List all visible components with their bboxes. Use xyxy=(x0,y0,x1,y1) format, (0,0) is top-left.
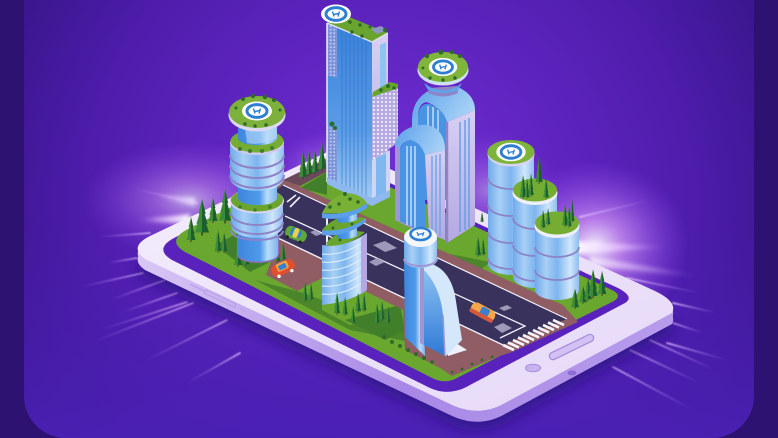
trees: left lawn xyxy=(186,190,286,267)
tower: tall glass xyxy=(321,4,398,206)
crosswalk xyxy=(503,320,564,350)
tower: mid terraced xyxy=(322,192,367,305)
trees: right patch xyxy=(571,269,606,309)
tower: twin arches, front xyxy=(395,125,445,240)
road markings xyxy=(278,185,567,345)
phone body xyxy=(138,146,673,422)
phone speaker slot xyxy=(553,338,590,356)
stacked cylinder C xyxy=(534,199,580,300)
phone screen xyxy=(163,160,629,392)
glow behind phone xyxy=(80,130,690,330)
tower: left round xyxy=(228,94,286,263)
stacked cylinder A xyxy=(488,140,534,275)
ground lawn xyxy=(176,158,618,381)
phone microphone xyxy=(568,370,576,376)
car: green xyxy=(283,224,308,245)
trees: front lawn xyxy=(334,292,390,324)
light rays: streaks xyxy=(80,188,727,410)
trees: centre lawn xyxy=(302,212,486,302)
lawn shadows xyxy=(215,172,490,345)
sidewalks xyxy=(236,160,578,376)
phone home button xyxy=(526,364,540,372)
hedge along the front edge xyxy=(382,335,493,373)
stacked cylinder B xyxy=(512,157,558,288)
road xyxy=(238,185,567,345)
phone: shadow xyxy=(138,166,673,431)
light rays: soft core xyxy=(135,194,705,277)
tower: twin arches, back xyxy=(412,50,475,243)
trees: back lawn xyxy=(299,142,326,179)
car: orange left xyxy=(270,258,297,280)
car: orange front xyxy=(469,301,497,323)
tower: front arch with helipad xyxy=(404,227,467,356)
parking patches xyxy=(310,230,512,333)
